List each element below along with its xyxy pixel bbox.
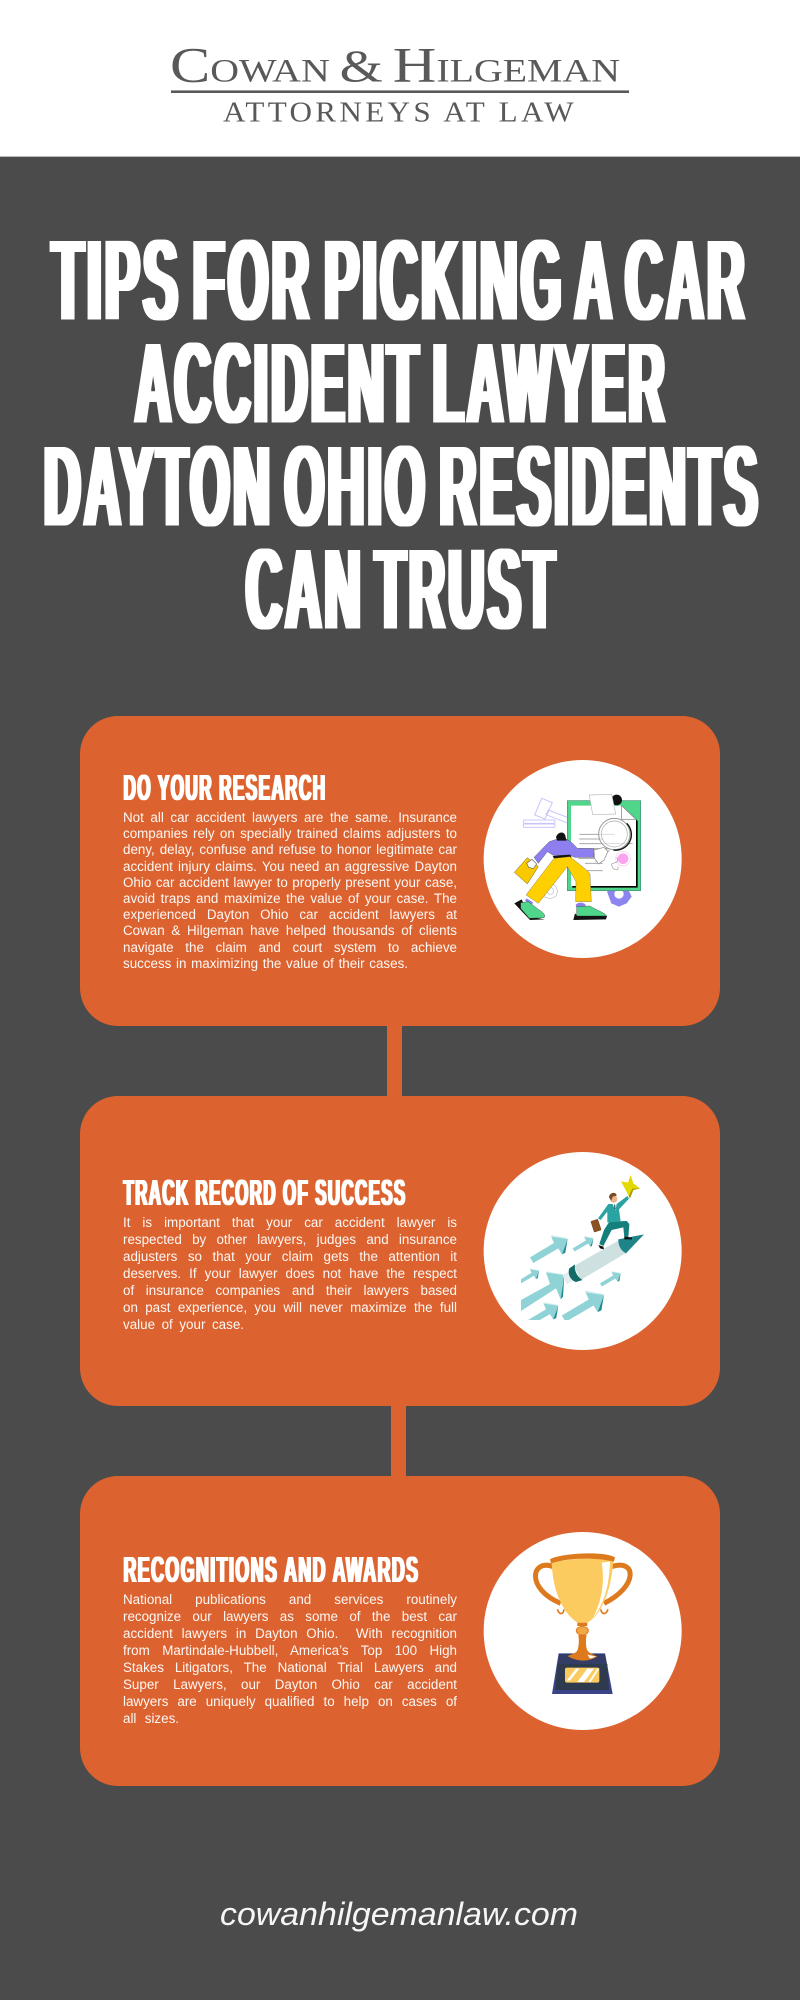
text block: recognitions and awards bbox=[123, 1592, 457, 1726]
text block: do your research: avoid traps and maximize the value of your case. The bbox=[123, 891, 457, 906]
icon: person with clipboard and magnifier bbox=[484, 760, 682, 958]
title: ACCIDENT LAWYER bbox=[135, 317, 668, 449]
text block: do your research: accident injury claims. You need an aggressive Dayton bbox=[123, 859, 457, 874]
text block: track record of success: respected by other lawyers, judges and insurance bbox=[123, 1232, 457, 1247]
text block: recognitions and awards: lawyers are uniquely qualified to help on cases of bbox=[123, 1694, 457, 1709]
text block: track record of success bbox=[123, 1215, 457, 1332]
title: CAN TRUST bbox=[246, 523, 558, 655]
title bbox=[44, 214, 761, 655]
text block: do your research: success in maximizing the value of their cases. bbox=[123, 956, 408, 971]
star bbox=[621, 1175, 640, 1198]
arrows: rising teal arrows bbox=[521, 1235, 621, 1320]
text block: do your research: experienced Dayton Ohio car accident lawyers at bbox=[123, 907, 457, 922]
text block: recognitions and awards: from Martindale-Hubbell, America’s Top 100 High bbox=[123, 1643, 457, 1658]
panel: recognitions and awards bbox=[80, 1476, 720, 1786]
text block: recognitions and awards: Stakes Litigators, The National Trial Lawyers and bbox=[123, 1660, 457, 1675]
text block: track record of success: of insurance companies and their lawyers based bbox=[123, 1283, 457, 1298]
text block: do your research: Ohio car accident lawyer to properly present your case, bbox=[123, 875, 457, 890]
text block: do your research: navigate the claim and court system to achieve bbox=[123, 940, 457, 955]
text block: do your research: Not all car accident lawyers are the same. Insurance bbox=[123, 810, 457, 825]
panel: track record of success bbox=[80, 1096, 720, 1406]
text block: track record of success: adjusters so that your claim gets the attention it bbox=[123, 1249, 457, 1264]
icon: gold trophy bbox=[484, 1532, 682, 1730]
text block: recognitions and awards: all sizes. bbox=[123, 1711, 179, 1726]
text block: do your research: deny, delay, confuse and refuse to honor legitimate car bbox=[123, 842, 457, 857]
footer: website url: cowanhilgemanlaw.com bbox=[220, 1896, 578, 1932]
logo: Cowan & Hilgeman Attorneys at Law bbox=[170, 36, 629, 129]
text block: do your research bbox=[123, 810, 457, 971]
panel: do your research bbox=[80, 716, 720, 1026]
text block: track record of success: deserves. If your lawyer does not have the respect bbox=[123, 1266, 457, 1281]
icon: businessman riding a rocket pencil toward a star bbox=[484, 1152, 682, 1350]
connector: card 1 to card 2 bbox=[387, 1025, 402, 1097]
businessman bbox=[591, 1193, 632, 1249]
text block: track record of success: on past experience, you will never maximize the full bbox=[123, 1300, 457, 1315]
text block: recognitions and awards: National publications and services routinely bbox=[123, 1592, 457, 1607]
text block: do your research: Cowan & Hilgeman have helped thousands of clients bbox=[123, 923, 457, 938]
header: white logo band bbox=[0, 0, 800, 157]
text block: recognitions and awards: accident lawyers in Dayton Ohio. With recognition bbox=[123, 1626, 457, 1641]
connector: card 2 to card 3 bbox=[390, 1405, 406, 1477]
text block: recognitions and awards: recognize our lawyers as some of the best car bbox=[123, 1609, 457, 1624]
logo: Cowan & Hilgeman Attorneys at Law: COWAN & HILGEMAN bbox=[170, 36, 620, 92]
logo: Cowan & Hilgeman Attorneys at Law: ATTORNEYS AT LAW bbox=[223, 98, 577, 129]
text block: do your research: companies rely on specially trained claims adjusters to bbox=[123, 826, 457, 841]
text block: recognitions and awards: Super Lawyers, our Dayton Ohio car accident bbox=[123, 1677, 457, 1692]
text block: track record of success: It is important that your car accident lawyer is bbox=[123, 1215, 457, 1230]
text block: track record of success: value of your case. bbox=[123, 1317, 244, 1332]
